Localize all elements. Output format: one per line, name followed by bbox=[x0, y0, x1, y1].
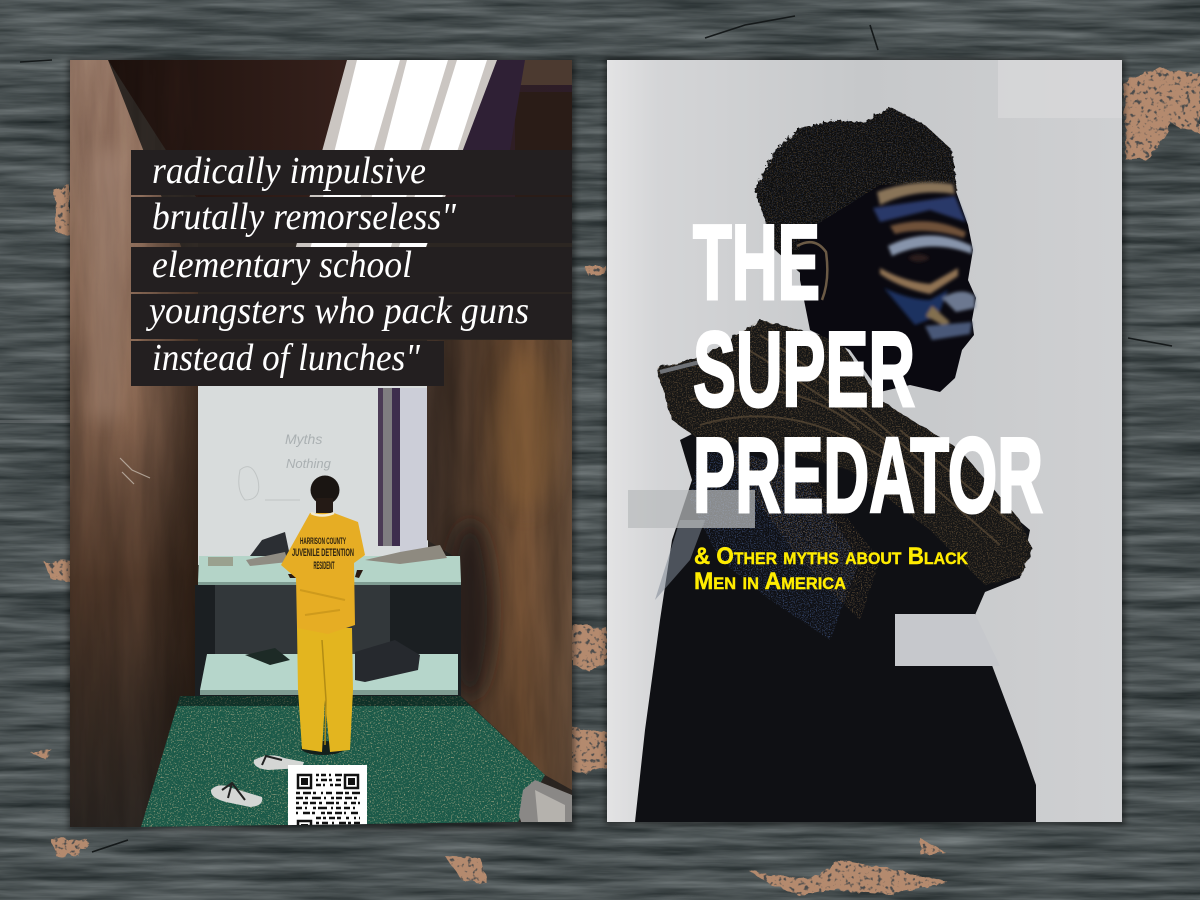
translucent block: lower right bbox=[895, 614, 1000, 666]
card shadows bbox=[68, 58, 1125, 830]
floor bbox=[140, 696, 550, 828]
ceiling bbox=[108, 60, 572, 200]
ceiling light fixture bbox=[295, 60, 497, 250]
quote text: instead of lunches" bbox=[152, 337, 421, 379]
quote text bbox=[145, 150, 529, 379]
uniform lettering bbox=[292, 538, 354, 569]
portrait figure bbox=[635, 107, 1036, 822]
back wall with scribbles: Myths bbox=[285, 431, 322, 447]
uniform lettering: JUVENILE DETENTION bbox=[292, 547, 354, 559]
uniform lettering: HARRISON COUNTY bbox=[300, 536, 346, 546]
title bbox=[693, 202, 1043, 535]
uniform lettering: RESIDENT bbox=[314, 560, 335, 572]
bunk beds bbox=[195, 532, 461, 697]
quote text: youngsters who pack guns bbox=[145, 290, 529, 332]
right book: front cover bbox=[607, 60, 1122, 822]
title: SUPER bbox=[693, 309, 915, 429]
right wall bbox=[427, 340, 572, 790]
head bbox=[800, 183, 976, 392]
translucent glitch block top right bbox=[998, 60, 1092, 118]
subtitle: & Other myths about Black bbox=[694, 543, 969, 570]
quote text: radically impulsive bbox=[152, 150, 426, 192]
back wall with scribbles bbox=[198, 380, 428, 565]
hair bbox=[754, 106, 958, 273]
quote bars bbox=[131, 150, 572, 386]
left wall bbox=[70, 60, 198, 827]
face paint bbox=[873, 182, 975, 340]
subtitle: Men in America bbox=[694, 568, 846, 595]
toilet rim bbox=[519, 780, 572, 825]
quote text: brutally remorseless" bbox=[152, 196, 457, 238]
translucent block: left bbox=[628, 490, 755, 528]
coat bbox=[635, 420, 1036, 822]
left book: back cover bbox=[70, 60, 572, 834]
back wall with scribbles: Nothing bbox=[286, 456, 332, 471]
speckled shoulder and chest bbox=[655, 440, 880, 640]
boy in yellow uniform bbox=[281, 476, 365, 755]
flip flops bbox=[211, 755, 304, 807]
quote text: elementary school bbox=[152, 244, 412, 286]
subtitle bbox=[694, 543, 969, 595]
scarf collar bbox=[656, 320, 1032, 585]
QR code bbox=[288, 765, 367, 826]
ear bbox=[797, 242, 827, 300]
title: THE bbox=[693, 202, 820, 322]
